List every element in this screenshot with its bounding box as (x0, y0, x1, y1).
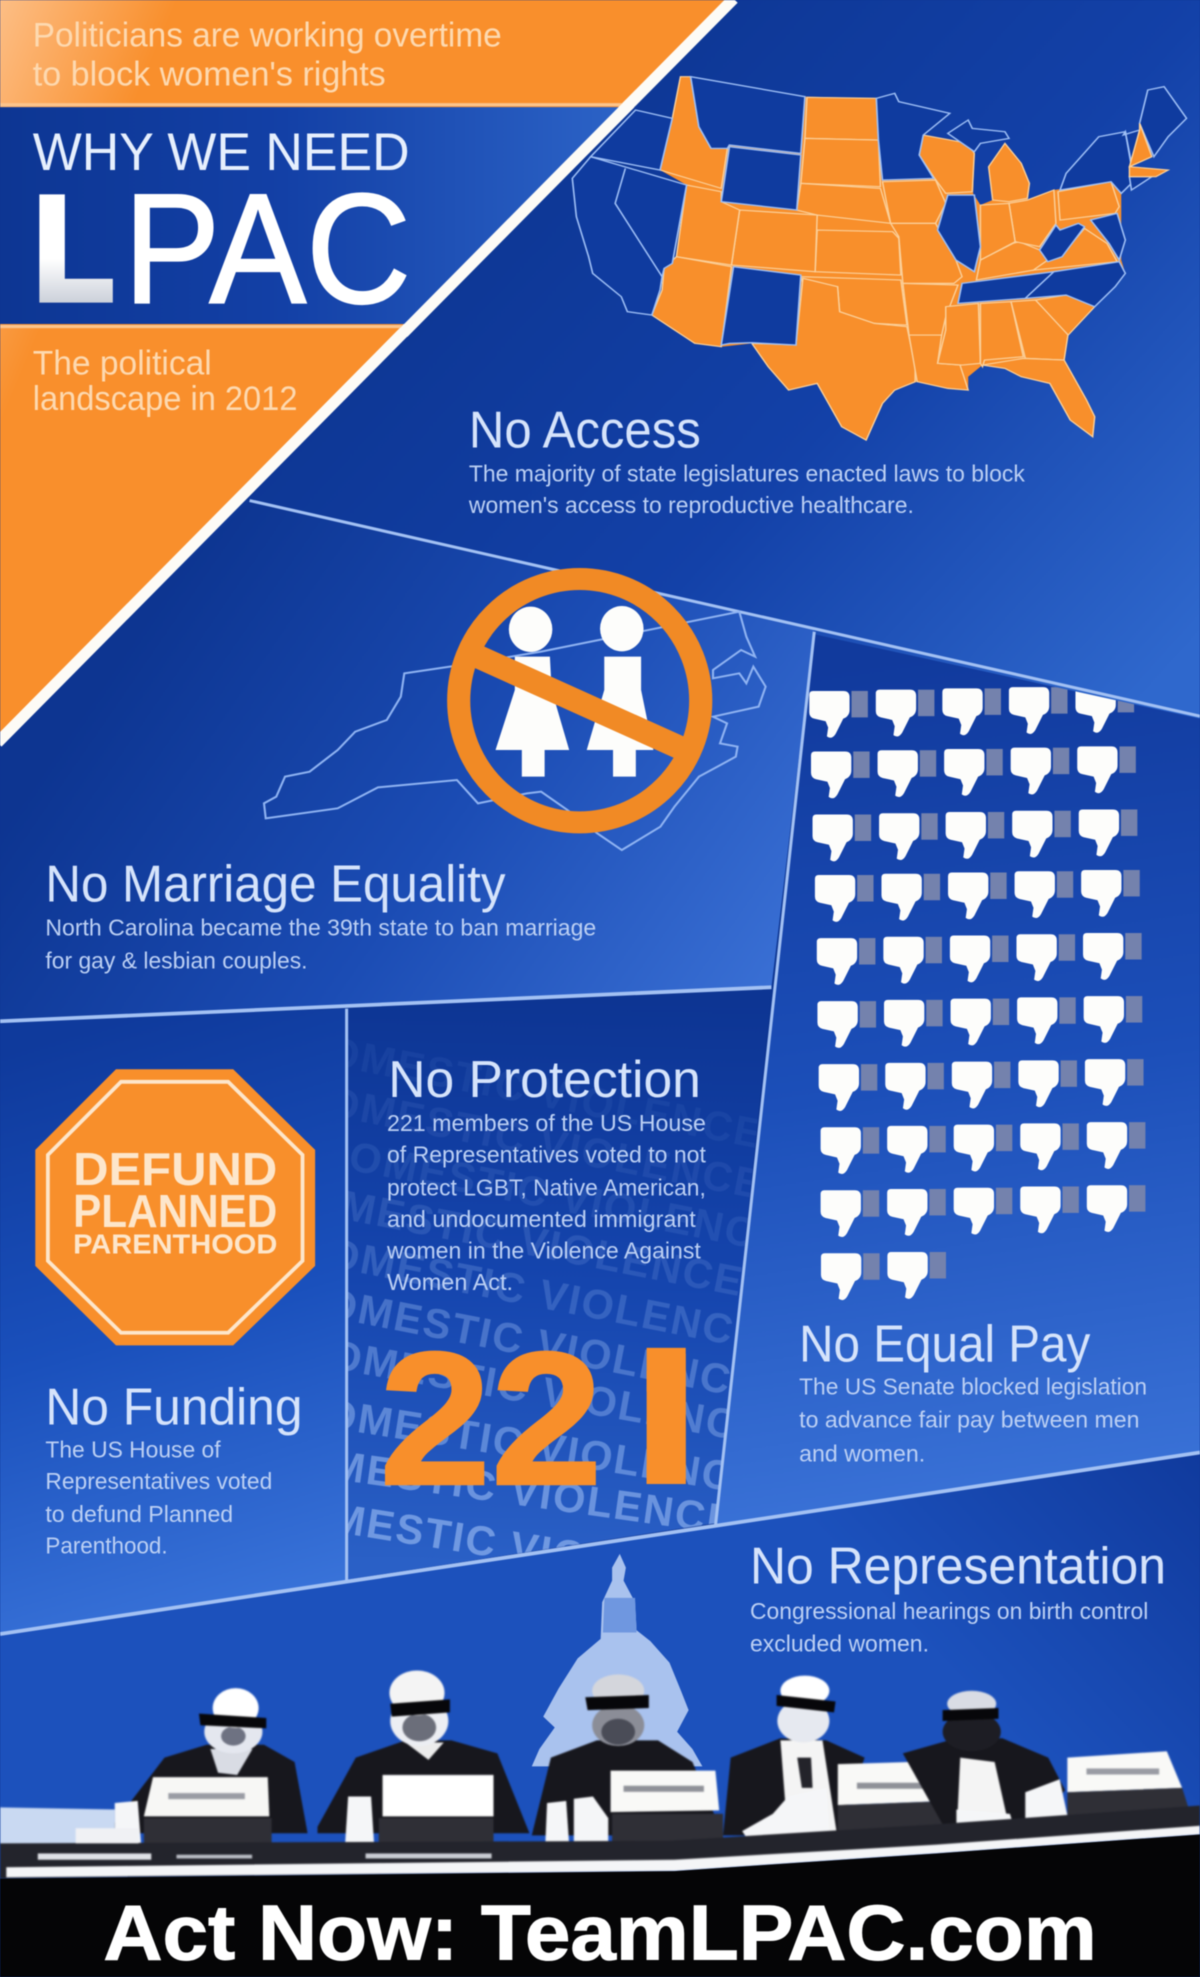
panel: no representation background (0, 1452, 1200, 1977)
text block: no representation: Congressional hearings on birth control (750, 1598, 1148, 1624)
text block: no protection: 221 members of the US House (387, 1110, 706, 1136)
text block: no marriage equality: for gay & lesbian couples. (45, 947, 308, 973)
text block: no access: No Access (469, 401, 701, 459)
subtitle: the political landscape (33, 344, 297, 418)
intro text: to block women's rights (33, 56, 386, 94)
text block: no protection: No Protection (388, 1050, 701, 1108)
text block: no marriage equality: North Carolina became the 39th state to ban marriage (45, 915, 596, 941)
text block: no protection: of Representatives voted to not (387, 1141, 707, 1167)
text block: no representation: excluded women. (750, 1631, 929, 1657)
title: why we need LPAC (33, 123, 411, 337)
big number: 221 (384, 1347, 687, 1486)
panel: orange title wedge (0, 0, 734, 743)
panel: no protection background with repeated words: DOMESTIC VIOLENCE DOMESTIC (292, 1071, 1011, 1256)
text block: no funding: Representatives voted (45, 1468, 272, 1494)
prohibition ring and bar (459, 579, 701, 822)
title: why we need LPAC: PAC (124, 162, 411, 337)
text block: no protection: protect LGBT, Native American, (387, 1174, 706, 1200)
panelist two (318, 1670, 529, 1849)
intro text: Politicians are working overtime (33, 17, 502, 55)
table surface with clutter (0, 1806, 1200, 1879)
text block: no equal pay: No Equal Pay (799, 1315, 1090, 1373)
icon: defund stop sign: PLANNED (73, 1185, 277, 1237)
states without restrictions (572, 77, 1187, 345)
panel: no protection background with repeated words: DOMESTIC VIOLENCE DOMESTIC (289, 1273, 1009, 1457)
map: United States, states with access restrictions in orange (572, 77, 1187, 440)
text block: no funding: The US House of (45, 1437, 221, 1463)
panel: no access background (0, 0, 1200, 757)
figure: first woman (496, 607, 569, 777)
text block: no access: women's access to reproductive healthcare. (468, 492, 914, 518)
text block: no access (468, 401, 1025, 518)
panelist four (723, 1676, 953, 1845)
panelist five (903, 1691, 1195, 1838)
text block: no funding: Parenthood. (45, 1532, 168, 1558)
chart: pictogram of thumbs-down icons (809, 686, 1145, 1300)
panel: no protection background with repeated words (348, 1040, 762, 1580)
text block: no equal pay: and women. (799, 1440, 925, 1466)
panel: no protection background with repeated words: DOMESTIC VIOLENCE DOMESTIC (262, 1483, 984, 1643)
panel: no protection background with repeated words: DOMESTIC VIOLENCE DOMESTIC (289, 1384, 1012, 1544)
water bottles and papers on table (115, 1779, 1071, 1857)
panelist three (532, 1674, 723, 1848)
intro text (33, 17, 502, 94)
footer: black call-to-action band (0, 1835, 1200, 1977)
panel: no protection background with repeated words: DOMESTIC VIOLENCE DOMESTIC (292, 1223, 1011, 1407)
text block: no equal pay: The US Senate blocked legislation (799, 1373, 1147, 1399)
icon: defund stop sign: DEFUND (73, 1143, 277, 1195)
text block: no access: The majority of state legislatures enacted laws to block (469, 461, 1025, 487)
text block: no marriage equality: No Marriage Equality (45, 854, 506, 913)
big number: 221: 1 (628, 1314, 733, 1525)
text block: no protection (386, 1050, 707, 1295)
text block: no representation: No Representation (750, 1537, 1166, 1595)
text block: no marriage equality (45, 854, 596, 973)
text block: no representation (750, 1537, 1166, 1657)
panelist one (115, 1688, 308, 1849)
New England restricted states (1129, 123, 1168, 177)
text block: no funding (45, 1378, 303, 1558)
title: why we need LPAC: WHY WE NEED (33, 123, 410, 182)
states with restrictions (652, 77, 1119, 440)
icon: defund stop sign (35, 1069, 315, 1345)
icon: Capitol dome silhouette (532, 1554, 702, 1766)
panel: no protection background with repeated words: DOMESTIC VIOLENCE DOMESTIC (262, 1432, 985, 1579)
subtitle: the political landscape: The political (33, 344, 212, 382)
panel: no protection background with repeated words: DOMESTIC VIOLENCE DOMESTIC (314, 1126, 1034, 1310)
panel divider lines (0, 501, 1200, 1634)
text block: no funding: to defund Planned (45, 1501, 233, 1527)
pale table edge at left (0, 1807, 115, 1851)
text block: no protection: Women Act. (387, 1269, 513, 1295)
panel: no equal pay background (716, 634, 1200, 1532)
subtitle: the political landscape: landscape in 2012 (33, 380, 297, 418)
panel: no protection background with repeated words: DOMESTIC VIOLENCE DOMESTIC (292, 1021, 1011, 1205)
text block: no funding: No Funding (45, 1378, 303, 1436)
text block: no protection: and undocumented immigrant (387, 1206, 697, 1232)
panel: no marriage equality background (0, 501, 814, 1021)
panel: no protection background with repeated words: DOMESTIC VIOLENCE DOMESTIC (294, 1325, 1015, 1497)
orange land silhouette (652, 77, 1125, 440)
icon: North Carolina outline (264, 612, 766, 850)
footer: black call-to-action band: Act Now: TeamLPAC.com (103, 1888, 1097, 1976)
panel: no funding background (0, 1009, 347, 1634)
big number: 221: 22 (379, 1314, 603, 1525)
icon: prohibited same-sex couple sign (459, 579, 701, 822)
text block: no protection: women in the Violence Against (386, 1237, 702, 1263)
title: why we need LPAC: L (34, 167, 113, 330)
icon: defund stop sign: PARENTHOOD (73, 1228, 277, 1259)
photo: five men at a congressional hearing with censored eyes (0, 1670, 1200, 1879)
text block: no equal pay (799, 1315, 1147, 1466)
panel: no protection background with repeated words: DOMESTIC VIOLENCE DOMESTIC (272, 1168, 992, 1353)
figure: second woman (587, 606, 653, 777)
text block: no equal pay: to advance fair pay between men (799, 1406, 1139, 1432)
